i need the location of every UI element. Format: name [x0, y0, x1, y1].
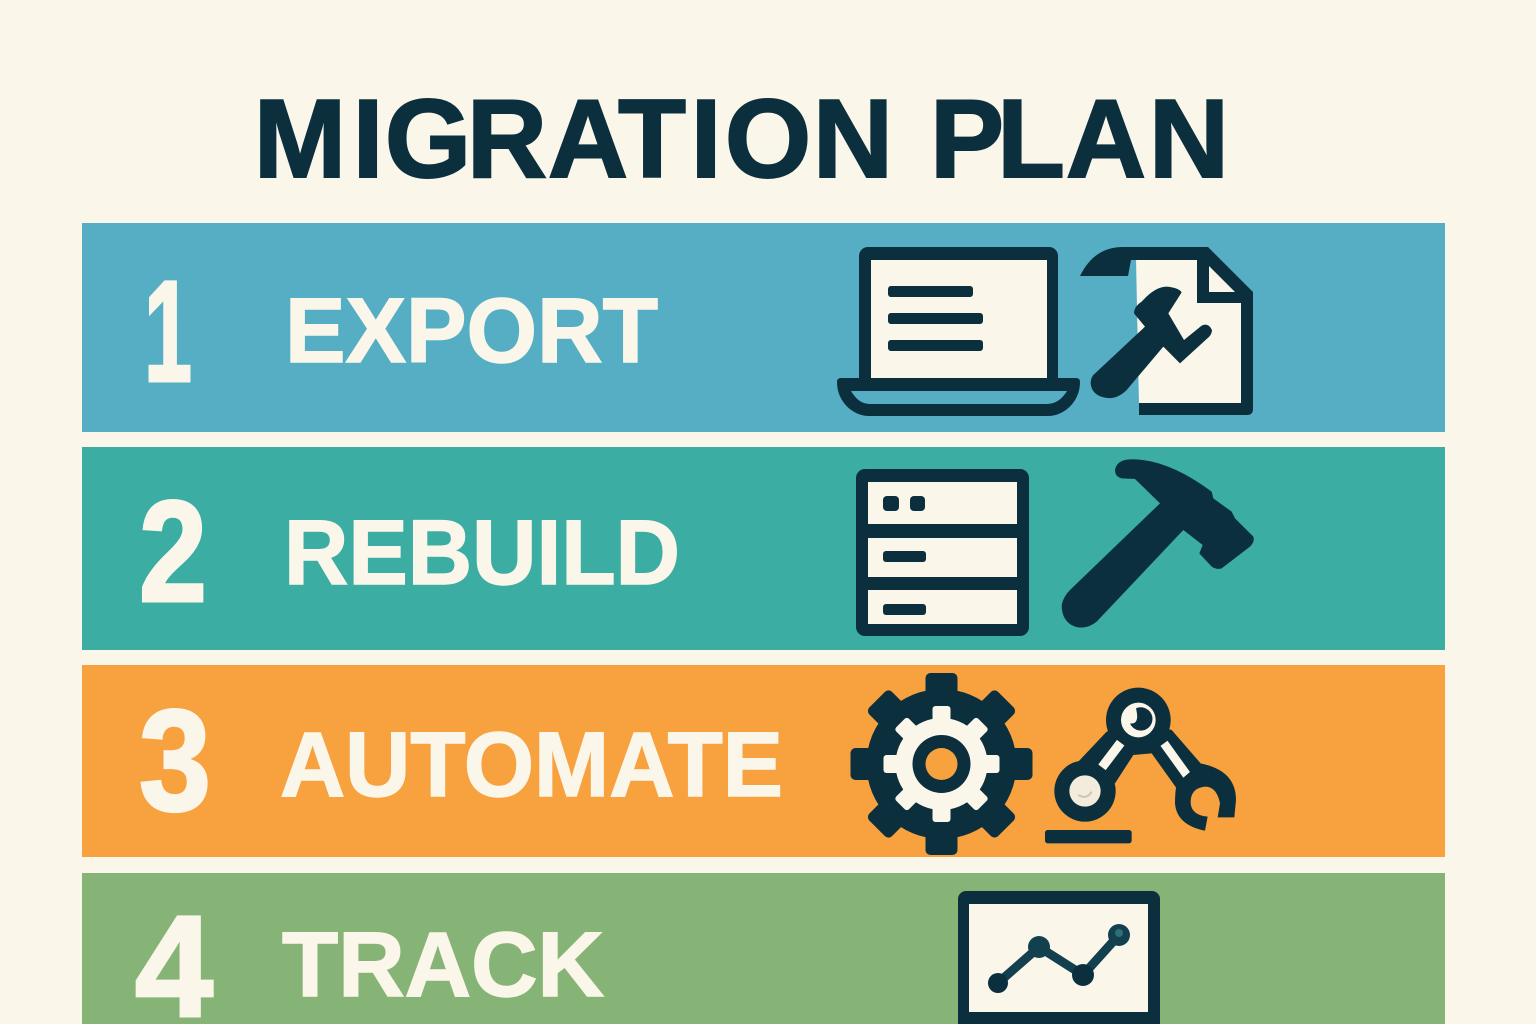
icon: line chart	[958, 891, 1160, 1024]
step label automate: AUTOMATE	[280, 714, 783, 816]
step number 3: 3	[139, 680, 211, 841]
step number 2: 2	[139, 471, 207, 632]
icon: robot arm	[1045, 688, 1236, 843]
icon: gear	[850, 673, 1032, 855]
step label export: EXPORT	[285, 280, 658, 382]
panel: step 4 track	[82, 873, 1445, 1024]
panel: step 3 automate	[82, 665, 1445, 857]
step number 1: 1	[144, 251, 192, 412]
step label track: TRACK	[282, 914, 604, 1016]
icon: laptop	[837, 247, 1080, 416]
step label rebuild: REBUILD	[284, 502, 680, 604]
panel: step 1 export	[82, 223, 1445, 432]
title: MIGRATION PLAN	[254, 77, 1229, 201]
icon: server stack	[856, 469, 1029, 636]
panel: step 2 rebuild	[82, 447, 1445, 650]
icon: hammer	[1062, 459, 1254, 628]
icon: document with wrench	[1080, 247, 1253, 415]
